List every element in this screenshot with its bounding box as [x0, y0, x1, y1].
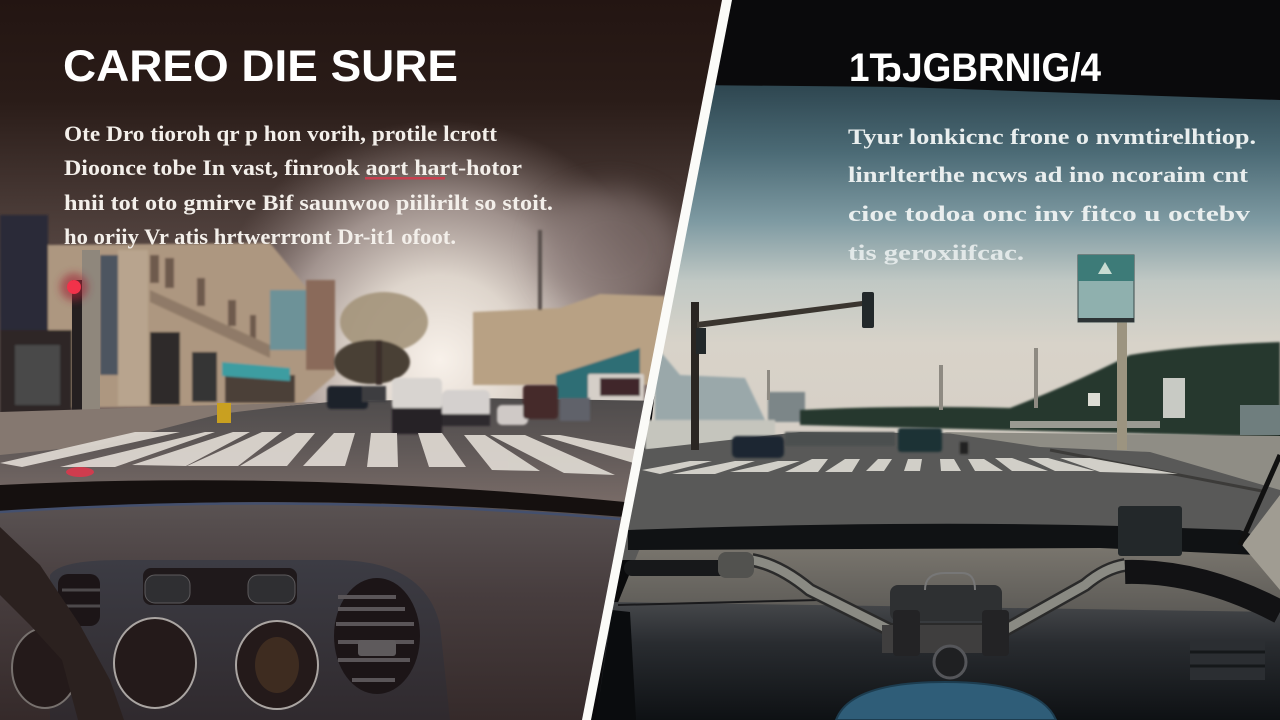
text block: left: ho oriiy Vr atis hrtwerrront Dr-it1 ofoot. [64, 224, 456, 249]
fairing right [1242, 495, 1280, 590]
tree line [800, 342, 1280, 437]
road [0, 398, 644, 482]
panel: motorcycle view (right) [580, 0, 1280, 720]
lower dash [596, 602, 1280, 720]
text block: left: hnii tot oto gmirve Bif saunwoo piilirilt so stoit. [64, 190, 553, 215]
text block: right: linrlterthe ncws ad ino ncoraim cnt [848, 162, 1249, 187]
text block: left [64, 121, 553, 249]
text block: right [848, 124, 1256, 265]
tree [334, 292, 428, 385]
building left [0, 215, 335, 415]
center console [50, 560, 445, 675]
mirror block [1118, 506, 1182, 556]
divider [582, 0, 732, 720]
handlebars [632, 552, 1280, 630]
building right [472, 229, 664, 401]
panel: car view (left) [0, 0, 730, 720]
road [620, 432, 1280, 560]
traffic light red [60, 250, 100, 428]
cars [327, 378, 590, 434]
windshield base [628, 524, 1280, 556]
crosswalk stripes [642, 458, 1178, 474]
roadside signs [1088, 378, 1185, 418]
text block: left: Dioonce tobe In vast, finrook aort hart-hotor [64, 155, 522, 180]
title: right: 1ЂJGBRNIG/4 [849, 46, 1102, 90]
red underline accent [365, 177, 445, 180]
display slot with knobs [143, 568, 297, 605]
steering wheel [0, 527, 124, 720]
vent left [58, 574, 100, 626]
cars far [732, 428, 968, 458]
text block: right: Tyur lonkicnc frone o nvmtirelhtiop. [848, 124, 1256, 149]
gauges [12, 618, 318, 709]
gauge pod [836, 682, 1056, 720]
title: left: CAREO DIE SURE [63, 42, 458, 91]
dashboard [0, 492, 625, 720]
text block: right: tis geroxiifcac. [848, 240, 1024, 265]
text block: left: Ote Dro tioroh qr p hon vorih, protile lcrott [64, 121, 498, 146]
text block: right: cioe todoa onc inv fitco u octebv [848, 201, 1250, 226]
left dark pillar [596, 610, 636, 720]
green road sign [1078, 255, 1134, 450]
vent right [334, 578, 420, 694]
traffic signal pole [691, 292, 874, 450]
crosswalk stripes [0, 432, 640, 475]
hood area [615, 545, 1280, 615]
far buildings [645, 345, 805, 450]
handlebar clamp [882, 573, 1009, 678]
poles [767, 348, 1038, 410]
smoke haze [540, 190, 680, 310]
